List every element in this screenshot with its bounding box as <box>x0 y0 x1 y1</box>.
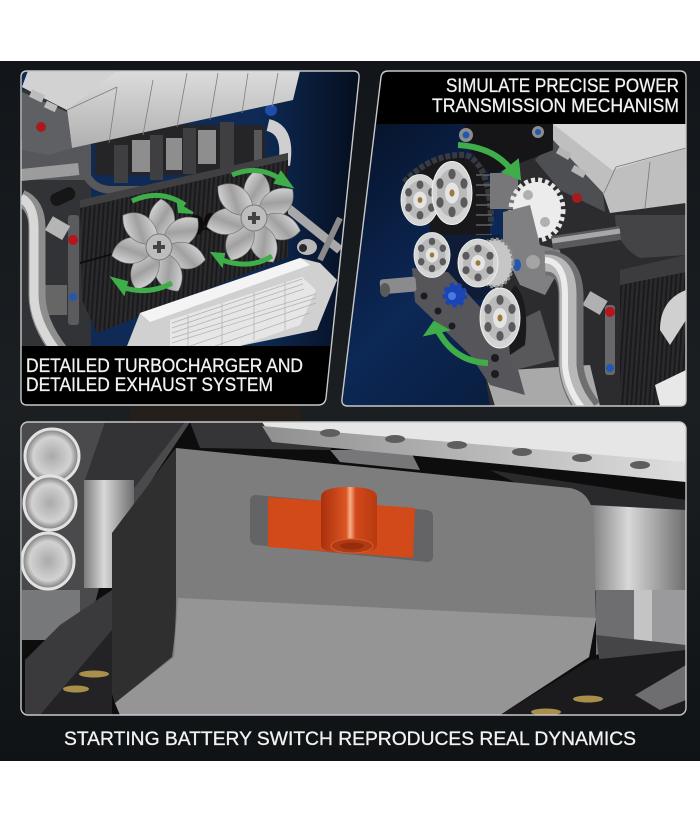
caption: turbocharger: DETAILED EXHAUST SYSTEM <box>26 374 273 396</box>
icon: green arrow top <box>458 145 520 179</box>
white gear <box>511 180 563 240</box>
pulleys <box>401 162 526 355</box>
white top beam <box>262 422 686 482</box>
battery box <box>112 448 596 715</box>
caption: power transmission: TRANSMISSION MECHANISM <box>432 95 679 117</box>
caption band <box>22 346 331 404</box>
panel border left <box>21 71 359 405</box>
hood cover <box>22 71 300 155</box>
panel border right <box>342 71 686 406</box>
switch slot <box>250 495 433 562</box>
manifold and pipes <box>20 104 340 260</box>
icon: right fan <box>206 173 301 262</box>
radiator block <box>80 153 288 333</box>
under-beam parts <box>190 422 686 510</box>
icon: green arrows right fan <box>212 171 292 266</box>
gray liftarm frame <box>379 268 555 395</box>
icon: green arrows left fan <box>112 195 193 294</box>
engine right side <box>486 156 686 406</box>
battery side face <box>112 448 176 703</box>
caption: turbocharger: DETAILED TURBOCHARGER AND <box>26 355 303 377</box>
left engine body <box>21 90 91 352</box>
panel: turbocharger and exhaust <box>20 71 361 406</box>
bottom caption: STARTING BATTERY SWITCH REPRODUCES REAL DYNAMICS <box>64 728 636 750</box>
orange switch <box>268 497 415 558</box>
left structure <box>22 422 190 715</box>
intercooler <box>127 258 337 346</box>
panel: battery switch <box>21 422 686 716</box>
caption band <box>370 71 690 124</box>
icon: three metal ring holes <box>22 429 79 589</box>
icon: blue gear <box>445 285 465 305</box>
icon: green arrow bottom <box>425 322 488 363</box>
hood corner <box>535 124 686 213</box>
chain and gear stacks <box>404 124 553 300</box>
caption: power transmission <box>432 75 679 117</box>
gray gearbox housing <box>503 205 562 295</box>
silver exhaust pipes <box>545 231 620 410</box>
right mechanism <box>500 505 686 716</box>
caption: turbocharger <box>26 355 303 396</box>
panel border bottom <box>21 422 686 715</box>
panel: power transmission <box>340 71 690 410</box>
icon: left fan <box>109 199 208 297</box>
